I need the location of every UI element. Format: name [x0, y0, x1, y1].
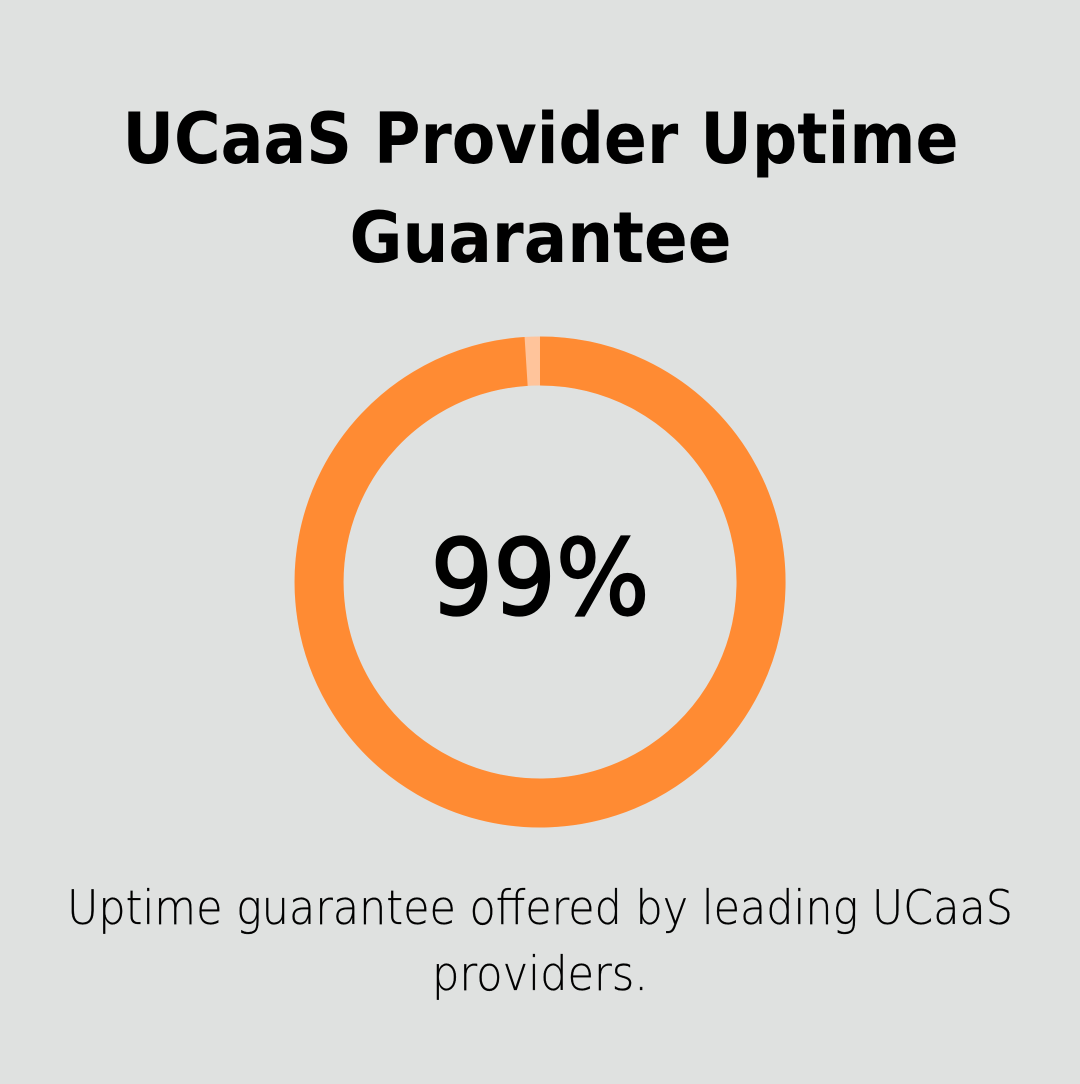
title: UCaaS Provider Uptime: [122, 98, 958, 180]
title: [122, 98, 958, 279]
percentage value: 99%: [430, 517, 650, 639]
caption: providers.: [432, 947, 648, 1002]
caption: [67, 881, 1013, 1002]
donut chart: [319, 361, 761, 803]
donut 99% segment: [319, 361, 761, 803]
title: Guarantee: [350, 197, 732, 279]
donut remainder segment: [319, 361, 761, 803]
